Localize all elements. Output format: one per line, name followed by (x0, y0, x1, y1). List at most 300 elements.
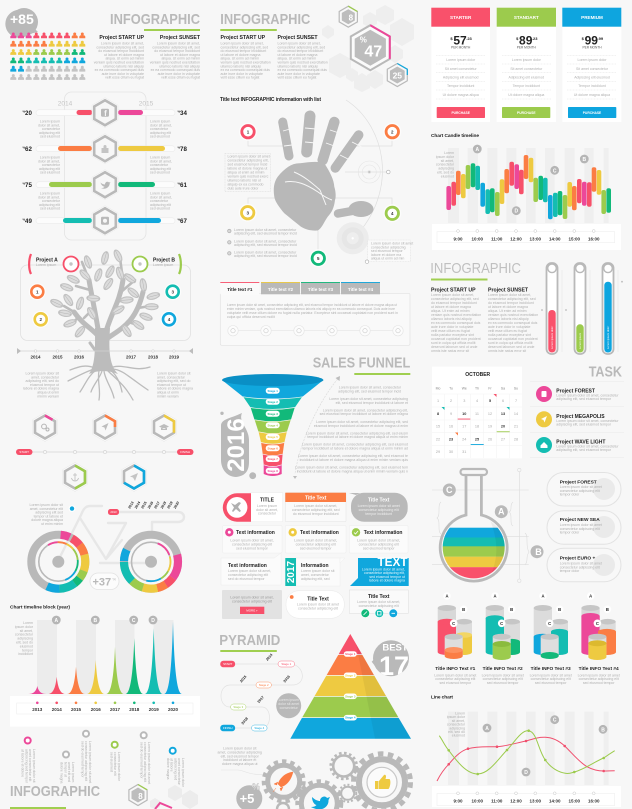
chart note: consectetur (447, 723, 466, 727)
captions: Lorem ipsum dolor sit amet (530, 674, 572, 678)
year badge 2016 (220, 412, 256, 479)
bar tracks (36, 110, 175, 224)
text block left: deserunt laborum sed ut unde (431, 345, 478, 349)
candle markers: A (475, 147, 479, 153)
card: more button: consectetur adipiscing elit (232, 600, 272, 604)
tree note right: amet, consectetur (157, 375, 186, 379)
candle markers: D (514, 209, 518, 215)
text block: project sunset: aliqua. Ut enim ad minim (161, 57, 200, 61)
card: 2017: Information (301, 563, 328, 569)
spike series (28, 622, 182, 694)
dates: 14 (514, 412, 518, 416)
pyramid chart: Stage 4 (345, 716, 356, 720)
card: standart: PURCHASE (517, 111, 536, 115)
label: project b (132, 254, 181, 274)
left values: 49 (25, 218, 32, 225)
markers: D (524, 770, 528, 776)
card: text info lime: consectetur adipiscing elit (359, 542, 399, 546)
badge: +85: +85 (10, 11, 34, 27)
roadmap bubble: Lorem ipsum (279, 698, 299, 702)
timeline years: 2014 (30, 354, 41, 360)
text block left: aliqua. Ut enim ad minim (431, 309, 470, 313)
cylinder group 2 (486, 592, 520, 660)
roadmap path (221, 664, 302, 728)
notes left: Lorem ipsum (40, 156, 60, 160)
card: text info yellow: consectetur adipiscing elit (296, 542, 336, 546)
roadmap tags: 2017 (257, 695, 265, 704)
right values: 78 (180, 146, 187, 153)
text box left: ullamco laboris nisi ut (228, 178, 261, 182)
text block left: do eiusmod tempor incididunt (431, 301, 477, 305)
rotated year labels: 2015 (140, 501, 148, 510)
chart note: adipiscing (17, 637, 33, 641)
rotated year labels: 2014 (134, 501, 141, 510)
dates: 10 (462, 412, 466, 416)
marker 3 (239, 204, 257, 222)
text block: project sunset: ex ea commodo consequat duis (151, 68, 200, 72)
funnel: Stage 2 (268, 400, 278, 404)
dates: 27 (501, 438, 505, 442)
tab 3: Title text #3 (308, 287, 334, 292)
card: premium: Adipiscing elit eiusmod (574, 76, 610, 80)
marker 1 (239, 123, 257, 141)
year band (10, 696, 200, 727)
funnel notes: Lorem ipsum dolor sit amet, consectetur adipiscing elit, (323, 408, 408, 412)
numbered markers: 3 (171, 289, 174, 294)
card: more button: Lorem ipsum dolor sit amet, (230, 596, 274, 600)
vertical notes: ut labore (170, 758, 174, 772)
notes right (150, 120, 172, 211)
percent signs: % (178, 146, 180, 150)
card: title plane (223, 493, 283, 522)
notes left: consectetur (42, 199, 61, 203)
card: 2017: amet, consectetur (301, 573, 330, 577)
funnel notes: Lorem ipsum dolor sit amet, consectetur (339, 386, 402, 390)
chart note: ipsum dolor (15, 625, 34, 629)
hexagon 25: 25 (393, 70, 402, 80)
marker 2 (383, 123, 401, 141)
dates: 17 (462, 424, 466, 428)
marker 1: 1 (247, 129, 250, 134)
notes right: adipiscing elit (150, 167, 171, 171)
badge: best 17: BEST (382, 642, 408, 654)
chart title: Chart timeline block (year) (10, 604, 70, 610)
step nodes (228, 326, 403, 336)
candle note: Lorem (444, 151, 454, 155)
text block: project start up: aliqua. Ut enim ad minim (105, 57, 144, 61)
notes left: adipiscing elit (39, 167, 60, 171)
notes right: dolor sit amet, (150, 123, 172, 127)
captions: sed eiusmod tempor (487, 681, 519, 685)
notes left: Lorem ipsum (40, 120, 60, 124)
task: forest (536, 386, 619, 402)
text box left: aliquip ex ea commodo (228, 182, 264, 186)
text block: project start up: aute irure dolor in voluptate (102, 72, 144, 76)
panel: line chart (431, 694, 621, 807)
tube: green: Lorem ipsum (578, 332, 582, 349)
weekdays: Th (475, 386, 479, 390)
year band: 2014 (52, 707, 62, 712)
card: title plane: dolor sit amet, (256, 508, 278, 512)
percent signs: % (178, 110, 180, 114)
text block left: Project START UP (431, 288, 476, 294)
tree note right: Lorem ipsum dolor sit (157, 372, 190, 376)
bullet list: Lorem ipsum dolor sit amet, consectetur (234, 228, 297, 232)
time band: 11:00 (491, 236, 503, 242)
card: gray bubble: tempor incididunt (365, 512, 392, 516)
time band: 9:00 (453, 798, 463, 803)
funnel notes: incididunt ut labore et dolore magna aliqua ut enim minim veniam quis n (297, 469, 408, 473)
time band: 14:00 (549, 798, 561, 803)
card: standart (497, 8, 556, 122)
timeline years: 2016 (74, 354, 85, 360)
gear: twitter (297, 781, 341, 809)
text block left: ut labore et dolore magna (220, 53, 260, 57)
heading: SALES FUNNEL (313, 355, 410, 372)
card: blue text: Lorem ipsum dolor sit amet, (362, 568, 405, 572)
text box left: veniam quis nostrud exerc (228, 174, 269, 178)
card: starter: STARTER (450, 15, 472, 20)
gear note: amet, consectetur adipiscing (218, 750, 262, 754)
underline (354, 373, 410, 375)
card: standart: Lorem ipsum dolor (512, 58, 542, 62)
funnel: Stage 1 (268, 389, 278, 393)
underline (431, 278, 488, 280)
text block: project sunset: Lorem ipsum dolor sit amet, (157, 42, 200, 46)
tree note left: amet, consectetur (31, 375, 60, 379)
card: premium (562, 8, 621, 122)
text block: project start up: do eiusmod tempor incididunt (98, 49, 144, 53)
candle note: adipiscing (438, 167, 454, 171)
pill: forest: Lorem ipsum dolor sit amet (560, 485, 602, 489)
text block right: Lorem ipsum dolor sit amet, (488, 293, 531, 297)
target disc (337, 222, 369, 254)
tree note left: aliqua ut enim (37, 390, 59, 394)
start label: 2013 (110, 510, 117, 514)
cylinder group 4 (581, 592, 616, 660)
text box left: labore et dolore magna ut (228, 166, 267, 170)
pale hexagons (322, 5, 414, 92)
card: starter: $ (450, 36, 453, 41)
card: three icons: Lorem ipsum dolor sit amet, (357, 600, 400, 604)
text block right: omnis iste natus error sit (488, 349, 526, 353)
vertical notes: Lorem ipsum dolor sit amet (88, 741, 92, 783)
dates (436, 399, 518, 454)
note: Lorem ipsum dolor sit (30, 503, 63, 507)
text block: project sunset (150, 35, 201, 80)
year labels (58, 100, 154, 108)
hexagon 47 percent: 47 (364, 44, 382, 61)
rotated year labels: 2018 (160, 501, 167, 510)
year band: 2016 (91, 707, 101, 712)
cylinder group 3: B (558, 607, 561, 612)
tree note right: adipiscing elit, sed do (157, 379, 191, 383)
text block: project sunset: velit esse cillum eu fugiat (161, 76, 200, 80)
candle note: ipsum dolor (436, 155, 455, 159)
rotated year labels: 2013 (127, 501, 135, 510)
dates: 12 (488, 412, 492, 416)
captions: sed eiusmod tempor (583, 681, 615, 685)
vertical notes: consectetur elit (113, 752, 117, 776)
candle note: elit, sed do (437, 170, 454, 174)
left values: 20 (25, 110, 32, 117)
candle note: eiusmod (441, 174, 454, 178)
time band: 9:00 (453, 236, 463, 242)
heading: INFOGRAPHIC (10, 783, 100, 800)
gear: thumbs up (354, 754, 410, 809)
card: premium: PREMIUM (581, 15, 603, 20)
notes left: consectetur (42, 163, 61, 167)
year badge 2016: 2016 (223, 418, 250, 472)
tab 2 (261, 282, 300, 294)
badge: +5 percent: % (252, 782, 260, 792)
text box left (225, 153, 270, 192)
gear: small bottom (277, 803, 289, 809)
notes left: dolor sit amet, (38, 195, 60, 199)
chart columns (37, 620, 174, 694)
text block left: Lorem ipsum dolor sit amet, (220, 42, 264, 46)
funnel: Stage 3 (268, 412, 278, 416)
notes right: Lorem ipsum (150, 156, 170, 160)
gear note: dolore magna aliqua ut (222, 762, 258, 766)
chart note: sit amet, (20, 629, 33, 633)
notes right: consectetur (150, 127, 169, 131)
note: adipiscing elit sed (35, 511, 63, 515)
dates: 23 (449, 438, 453, 442)
markers: B (601, 727, 605, 733)
time band: 14:00 (549, 236, 561, 242)
tab text (227, 303, 398, 319)
time band: 15:00 (569, 236, 581, 242)
card: standart: PER MONTH (517, 45, 537, 49)
panel: tabs (220, 282, 410, 345)
text block right: Project SUNSET (278, 35, 318, 41)
label a: A (498, 507, 505, 517)
left wheel (31, 535, 85, 589)
right wheel (124, 535, 178, 589)
left values: 62 (25, 146, 32, 153)
tree note right: eiusmod tempor ut (157, 383, 186, 387)
label: project b: Lorem ipsum (153, 263, 173, 267)
chart note: adipiscing (449, 726, 465, 730)
roadmap bubble (276, 693, 301, 718)
timeline years (30, 354, 180, 360)
card: title plane: consectetur (258, 512, 277, 516)
timeline years: 2017 (126, 354, 137, 360)
year labels: 2014 (58, 100, 73, 108)
card: white bubble: consectetur adipiscing elit (298, 606, 338, 610)
+37% badge: +37 (92, 576, 111, 588)
bars (49, 110, 165, 223)
tab body (220, 293, 410, 345)
notes left: adipiscing elit (39, 131, 60, 135)
text block left: Lorem ipsum dolor sit amet, (431, 293, 474, 297)
heading: infographic: INFOGRAPHIC (110, 11, 200, 28)
percent signs (22, 110, 180, 222)
candles (446, 155, 611, 219)
text block: project sunset: consectetur adipiscing elit, sed (152, 45, 200, 49)
funnel (222, 374, 323, 476)
card: white bubble (286, 591, 344, 618)
card: standart: Ut dolore magna aliqua (508, 93, 544, 97)
text block left: aute irure dolor in voluptate (431, 325, 473, 329)
dates: 11 (475, 412, 479, 416)
target rings (358, 161, 390, 183)
tab 4: Title text #4 (348, 287, 374, 292)
hexagon icons: f (104, 109, 107, 118)
numbered markers: 4 (168, 317, 171, 322)
captions: Title INFO Text #2 (483, 666, 523, 672)
funnel notes: adipiscing elit, sed eiusmod tempor incid (338, 389, 401, 393)
badge: best 17 (372, 640, 409, 681)
text block left: nulla pariatur excepteur sint (431, 333, 474, 337)
process nodes (43, 450, 166, 454)
grid (432, 394, 522, 458)
vertical notes: Lorem ipsum dolor sit (32, 749, 36, 782)
card: premium: Tempor incididunt (578, 84, 606, 88)
text box left: Lorem ipsum dolor sit amet (228, 154, 270, 158)
task: megapolis: Project MEGAPOLIS (556, 414, 605, 420)
text block right: ullamco laboris nisi aliquip (488, 317, 529, 321)
notes right: consectetur (150, 163, 169, 167)
funnel notes: Lorem ipsum dolor sit amet, consectetur adipiscing elit, sed eiusmod (302, 443, 408, 447)
notes left: sed eiusmod (40, 135, 60, 139)
dividers (530, 382, 624, 457)
text block: project sunset: ullamco laboris nisi aliquip (159, 64, 200, 68)
card: title plane: Lorem ipsum (257, 504, 277, 508)
dates: 22 (436, 438, 440, 442)
cylinder group 3 (534, 592, 568, 659)
line: red (437, 737, 615, 781)
text block left: velit esse cillum eu fugiat (220, 76, 259, 80)
text block left: omnis iste natus error sit (431, 349, 469, 353)
hexagon 47 percent: % (360, 36, 367, 45)
notes right: adipiscing elit (150, 203, 171, 207)
text block: project start up: veniam quis nostrud exercitation (94, 60, 144, 64)
text block right: velit esse cillum eu fugiat (278, 76, 316, 80)
card: text info yellow (285, 526, 346, 553)
dates: 13 (501, 412, 505, 416)
axes (432, 468, 529, 582)
weekdays: Mo (436, 386, 440, 390)
hand (274, 116, 374, 231)
badge: +5 percent: +5 (240, 791, 254, 806)
roadmap tags: 2016 (283, 675, 291, 683)
funnel notes: incididunt ut labore et dolore magna aliqua ut enim minim veniam quis (300, 458, 408, 462)
pill: euro: Lorem ipsum dolor sit amet (560, 562, 602, 566)
dates: 31 (462, 450, 466, 454)
numbered markers: 1 (36, 289, 39, 294)
text block: project start up: Lorem ipsum dolor sit amet, (101, 42, 144, 46)
rotated year labels: 2020 (173, 501, 180, 510)
panel: callout cards (221, 493, 409, 619)
vertical notes: Lorem ipsum (71, 762, 75, 782)
column markers: A (54, 618, 58, 624)
notes left: dolor sit amet, (38, 159, 60, 163)
card: orange header: Title Text (305, 496, 327, 502)
tube: red: Lorem ipsum dolor (550, 326, 554, 349)
vertical notes: ut labore et dolore (21, 749, 25, 777)
text block right: aute irure dolor in voluptate (278, 72, 320, 76)
text block right (278, 35, 328, 80)
roadmap pills: START (223, 662, 233, 666)
card: text information arrow: consectetur adipiscing elit (228, 573, 268, 577)
candle markers: C (553, 168, 557, 174)
gear note: Lorem ipsum dolor sit (223, 746, 256, 750)
chart note: sit amet, (452, 719, 465, 723)
captions: consectetur adipiscing elit (483, 677, 523, 681)
chart note: eiusmod (452, 734, 465, 738)
column markers: D (151, 618, 155, 624)
column markers: C (132, 618, 136, 624)
panel: flask (432, 468, 544, 585)
card: more button (222, 590, 282, 619)
timeline years: 2019 (169, 354, 180, 360)
hexagon 25 (387, 64, 407, 86)
pyramid chart: Stage 3 (345, 694, 356, 698)
column markers: B (93, 618, 97, 624)
vertical notes: sed eiusmod (109, 752, 113, 772)
card: three icons (349, 590, 408, 618)
dates: 18 (475, 424, 479, 428)
percent signs: % (22, 182, 26, 186)
card: text info lime: Text information (364, 530, 402, 536)
card: gray bubble (349, 493, 408, 522)
card: text information arrow: Lorem ipsum dolor sit amet, (228, 569, 271, 573)
weekdays: We (462, 386, 467, 390)
text block right: ut labore et dolore magna (278, 53, 317, 57)
card: gray bubble: Lorem ipsum dolor sit amet (358, 504, 400, 508)
person icon grid (10, 32, 85, 80)
text block: project start up: ut labore et dolore magna (104, 53, 144, 57)
pill: euro (547, 548, 621, 582)
card: standart: $ (516, 36, 519, 41)
notes left: dolor sit amet, (38, 123, 60, 127)
column markers (52, 616, 157, 624)
text block: project start up: ex ea commodo consequat duis (95, 68, 144, 72)
vertical notes: amet consectetur elit (28, 749, 32, 781)
notes left: adipiscing elit (39, 203, 60, 207)
markers: A (485, 726, 489, 732)
text block left: ex ea commodo consequat duis (220, 68, 270, 72)
panel: bicycle chart (30, 501, 184, 590)
cylinder group 4: B (606, 607, 609, 612)
card: premium: Lorem ipsum dolor (578, 58, 607, 62)
tab 4 (341, 282, 380, 294)
text box right: consectetur adipiscing (371, 245, 406, 249)
text block: project start up: Project START UP (99, 35, 145, 41)
tree note left: labore et dolore magna (23, 387, 59, 391)
vertical notes: amet elit sed (67, 762, 71, 782)
cylinder group 3: A (541, 594, 545, 599)
tree note left: eiusmod tempor ut (30, 383, 59, 387)
notes right: sed eiusmod (150, 171, 170, 175)
chart note: elit, sed do (448, 730, 465, 734)
calendar card (432, 367, 522, 458)
dates: 25 (475, 438, 479, 442)
text box right: Lorem ipsum dolor sit amet (371, 242, 413, 246)
text block left: ullamco laboris nisi aliquip (220, 64, 261, 68)
panel: hexagon stats (220, 5, 414, 92)
dates: 9 (450, 412, 452, 416)
card: standart: Sit amet consectetur (510, 67, 543, 71)
chart note: consectetur (15, 633, 34, 637)
card: standart: 89 (519, 34, 533, 48)
note: tempor ut labore et (34, 514, 63, 518)
hex: anchor (62, 462, 88, 492)
left values: 75 (25, 182, 32, 189)
pill: forest: Project FOREST (560, 480, 597, 486)
